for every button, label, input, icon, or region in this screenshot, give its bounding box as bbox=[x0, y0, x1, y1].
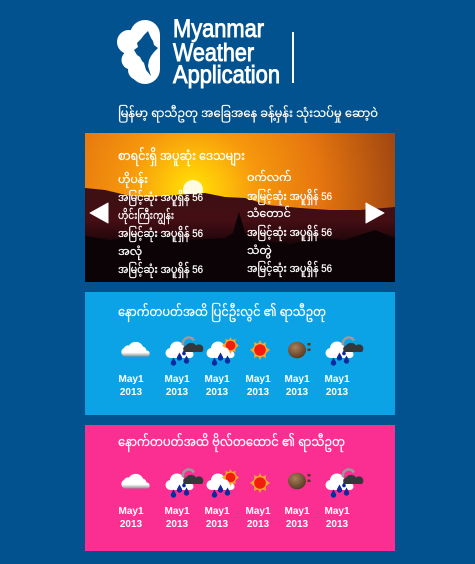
sunset photo bbox=[85, 133, 395, 282]
right city list: ဝက်လက် bbox=[247, 170, 292, 184]
left city list: အမြင့်ဆုံး အပူရှိန် 56 bbox=[118, 190, 203, 206]
panel: hottest places bbox=[85, 133, 395, 282]
forecast dates: 2013 bbox=[120, 387, 143, 398]
forecast dates bbox=[118, 506, 350, 530]
right city list: သံတွဲ bbox=[247, 244, 272, 259]
forecast dates: May1 bbox=[118, 374, 144, 385]
right city list: အမြင့်ဆုံး အပူရှိန် 56 bbox=[247, 225, 332, 241]
forecast dates: 2013 bbox=[247, 519, 270, 530]
icon: cloud with Myanmar map bbox=[117, 20, 160, 84]
forecast dates: May1 bbox=[324, 506, 350, 517]
forecast dates: May1 bbox=[284, 506, 310, 517]
app name: Weather bbox=[173, 39, 254, 67]
header logo bbox=[117, 15, 294, 89]
panel: Bawlakhe forecast bbox=[85, 425, 395, 551]
forecast dates: 2013 bbox=[206, 387, 229, 398]
right city list bbox=[247, 170, 332, 277]
forecast dates: May1 bbox=[324, 374, 350, 385]
heading: စာရင်းရှိ အပူဆုံး ဒေသများ bbox=[118, 147, 245, 166]
forecast dates: May1 bbox=[204, 374, 230, 385]
forecast dates: May1 bbox=[164, 506, 190, 517]
forecast dates: 2013 bbox=[120, 519, 143, 530]
forecast dates: 2013 bbox=[166, 519, 189, 530]
heading: နောက်တပတ်အထိ ပြင်ဦးလွင် ၏ ရာသီဥတု bbox=[118, 303, 326, 322]
forecast dates: May1 bbox=[118, 506, 144, 517]
arrow: next bbox=[366, 203, 384, 223]
forecast dates: 2013 bbox=[166, 387, 189, 398]
forecast dates: 2013 bbox=[247, 387, 270, 398]
left city list: ဟိုပန်း bbox=[118, 172, 148, 188]
forecast dates: May1 bbox=[245, 506, 271, 517]
left city list: အလုံ bbox=[118, 245, 142, 260]
forecast dates bbox=[118, 374, 350, 398]
left city list bbox=[118, 172, 203, 278]
app name: Application bbox=[173, 61, 280, 89]
forecast dates: 2013 bbox=[326, 387, 349, 398]
forecast dates: May1 bbox=[204, 506, 230, 517]
right city list: သံတောင် bbox=[247, 206, 291, 220]
forecast dates: May1 bbox=[284, 374, 310, 385]
app name bbox=[173, 15, 280, 89]
left city list: အမြင့်ဆုံး အပူရှိန် 56 bbox=[118, 226, 203, 242]
forecast dates: May1 bbox=[164, 374, 190, 385]
forecast dates: 2013 bbox=[206, 519, 229, 530]
forecast icons bbox=[121, 337, 363, 366]
forecast dates: 2013 bbox=[326, 519, 349, 530]
panel: Pyin Oo Lwin forecast bbox=[85, 292, 395, 415]
left city list: အမြင့်ဆုံး အပူရှိန် 56 bbox=[118, 262, 203, 278]
right city list: အမြင့်ဆုံး အပူရှိန် 56 bbox=[247, 189, 332, 205]
arrow: previous bbox=[90, 203, 108, 223]
forecast dates: 2013 bbox=[286, 519, 309, 530]
heading: နောက်တပတ်အထိ ဗိုလ်တထောင် ၏ ရာသီဥတု bbox=[118, 433, 345, 452]
tagline: မြန်မာ့ ရာသီဥတု အခြေအနေ ခန့်မှန်း သုံးသပ်မှု ဆော့ဝဲ bbox=[118, 104, 378, 123]
forecast icons bbox=[121, 469, 363, 498]
right city list: အမြင့်ဆုံး အပူရှိန် 56 bbox=[247, 261, 332, 277]
forecast dates: 2013 bbox=[286, 387, 309, 398]
left city list: ဟိုင်းကြီးကျွန်း bbox=[118, 208, 174, 225]
forecast dates: May1 bbox=[245, 374, 271, 385]
app name: Myanmar bbox=[173, 15, 264, 43]
